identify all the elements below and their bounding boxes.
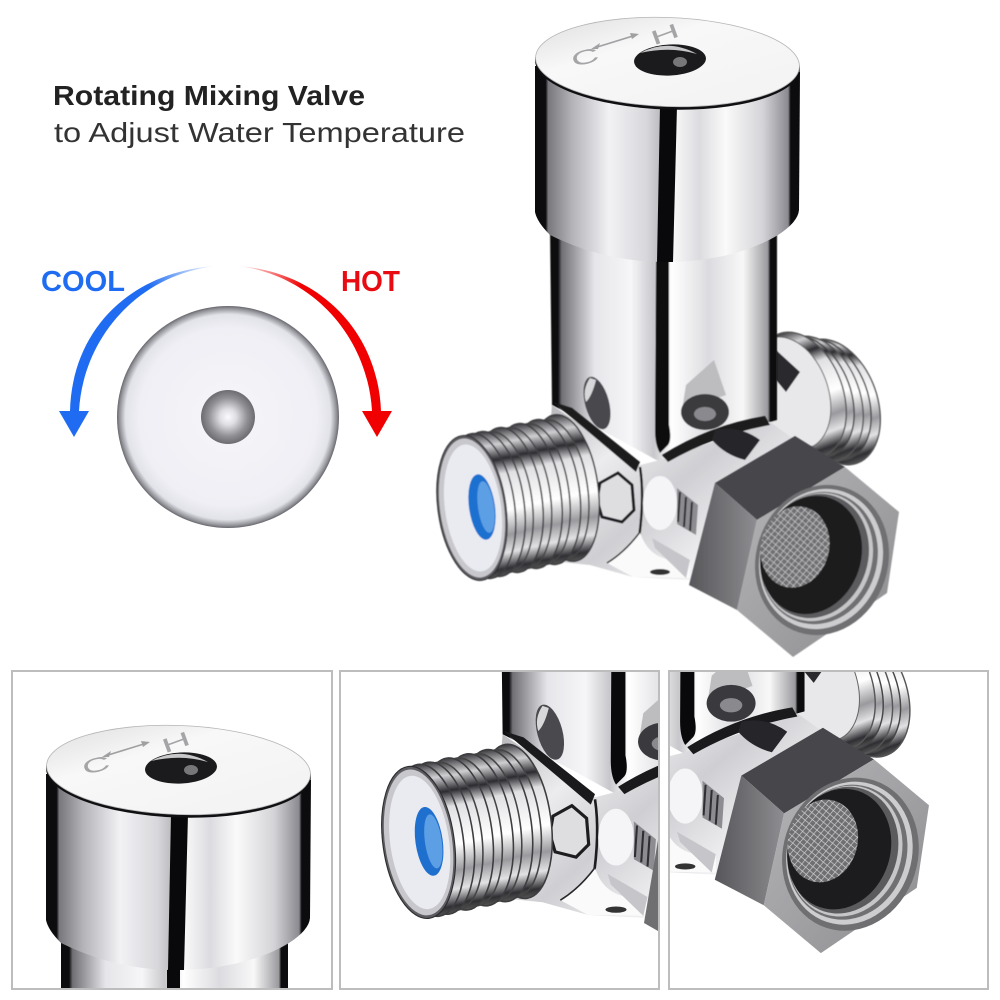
dial centre knob [201,390,255,444]
dial disc [117,306,339,528]
main valve illustration [428,13,908,657]
panel: inlet thread close-up [339,670,660,990]
arrow: hot [238,266,392,437]
label: hot: HOT [341,266,400,298]
panel: hex nut and filter close-up [668,670,989,990]
arrow: cool [59,266,215,437]
temperature dial diagram [41,266,400,528]
title [53,80,465,148]
label: cool: COOL [41,266,125,298]
title: Rotating Mixing Valve [53,80,365,111]
panel: cap close-up [12,671,332,989]
title: to Adjust Water Temperature [54,117,465,148]
